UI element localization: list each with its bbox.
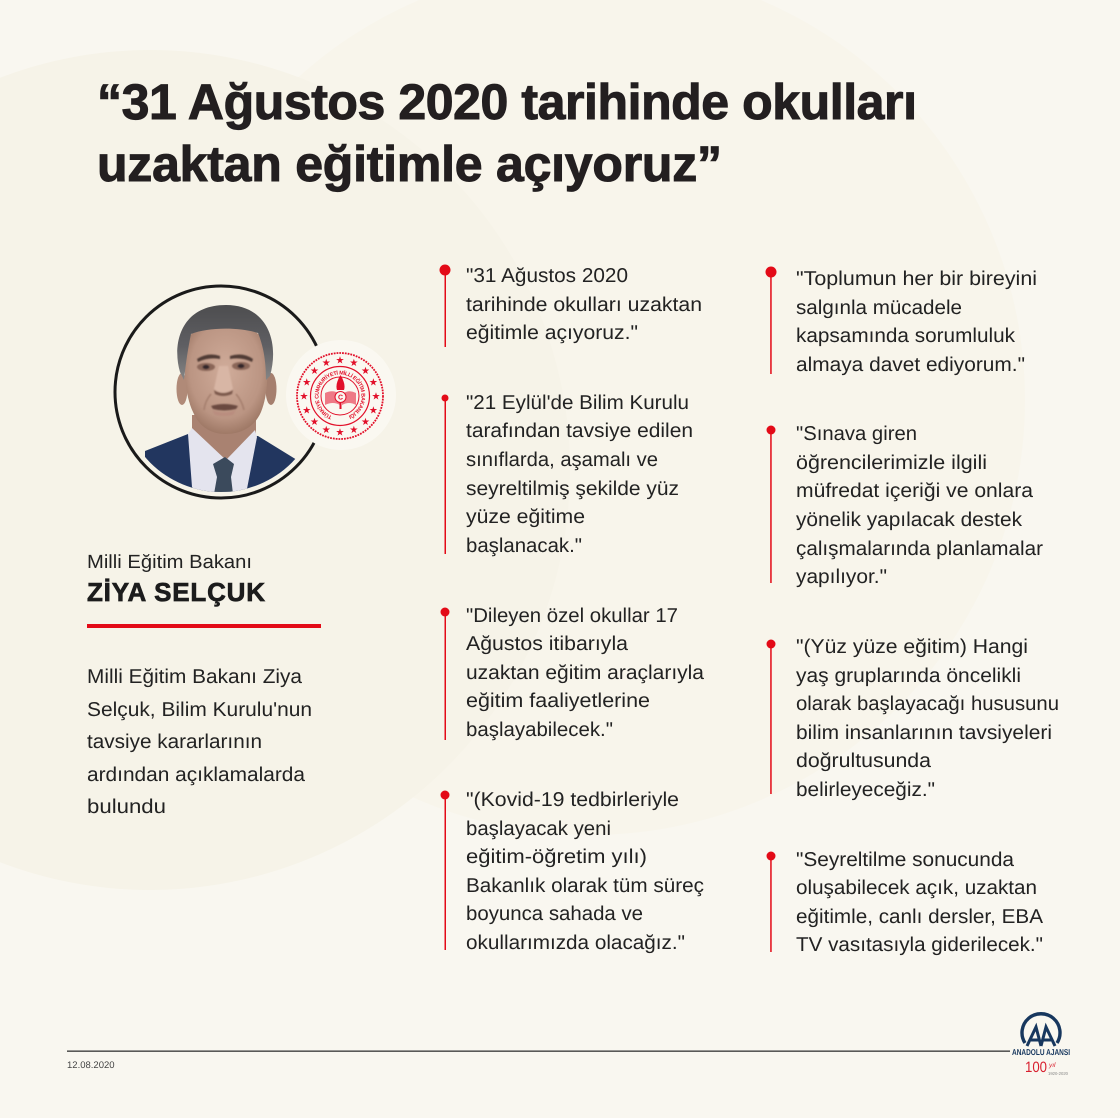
quote 3: uzaktan eğitim araçlarıyla: [466, 662, 705, 684]
quote 4: eğitim-öğretim yılı): [466, 846, 647, 868]
eye sockets: [197, 363, 215, 371]
summary paragraph: Selçuk, Bilim Kurulu'nun: [87, 699, 312, 721]
quote 1: tarihinde okulları uzaktan: [466, 294, 702, 316]
summary paragraph: [87, 666, 312, 818]
portrait of minister with ring: [115, 286, 327, 500]
quote 7: yaş gruplarında öncelikli: [796, 665, 1021, 687]
quote 5: "Toplumun her bir bireyini: [796, 268, 1037, 290]
emblem: ministry seal: ★: [369, 378, 378, 389]
footer rule: [67, 1050, 1010, 1052]
emblem: ministry seal: ★: [310, 366, 319, 377]
quote 5: kapsamında sorumluluk: [796, 325, 1016, 347]
quote 7: doğrultusunda: [796, 750, 932, 772]
quote 2: tarafından tavsiye edilen: [466, 420, 693, 442]
quote 6: yönelik yapılacak destek: [796, 509, 1023, 531]
quote 4: boyunca sahada ve: [466, 903, 643, 925]
nose: [214, 366, 233, 392]
quote 6: [766, 423, 1043, 588]
quote 4: Bakanlık olarak tüm süreç: [466, 875, 704, 897]
quote 4: [440, 789, 704, 954]
minister name: ZİYA SELÇUK: [87, 577, 265, 607]
emblem: ministry seal: ★: [361, 366, 370, 377]
quote 8: TV vasıtasıyla giderilecek.": [796, 934, 1043, 956]
quote 4: "(Kovid-19 tedbirleriyle: [466, 789, 679, 811]
red rule: [87, 624, 321, 628]
emblem: ministry seal: ★: [322, 358, 331, 369]
emblem: ministry seal: ★: [322, 425, 331, 436]
minister role: Milli Eğitim Bakanı: [87, 552, 252, 573]
quote 2: [442, 392, 693, 557]
emblem: ministry seal: C: [338, 394, 343, 402]
emblem: ministry seal: ★: [300, 392, 309, 402]
quote 3: [440, 605, 705, 741]
face: [185, 325, 267, 434]
logo: Anadolu Ajansi: ANADOLU AJANSI: [1012, 1047, 1070, 1057]
shirt: [188, 428, 257, 494]
emblem: ministry seal: ★: [336, 428, 345, 438]
emblem: ministry seal: ★: [310, 417, 319, 428]
quote 8: [766, 849, 1044, 956]
logo: Anadolu Ajansi: [1012, 1014, 1070, 1076]
emblem: ministry seal: ★: [336, 356, 345, 366]
quote 7: olarak başlayacağı hususunu: [796, 693, 1059, 715]
quote 7: bilim insanlarının tavsiyeleri: [796, 722, 1052, 744]
quote 7: [766, 636, 1059, 801]
mouth: [211, 404, 238, 410]
quote 8: oluşabilecek açık, uzaktan: [796, 877, 1037, 899]
title: uzaktan eğitimle açıyoruz”: [97, 136, 722, 192]
quote 6: "Sınava giren: [796, 423, 917, 445]
quote 5: almaya davet ediyorum.": [796, 354, 1025, 376]
quote 6: öğrencilerimizle ilgili: [796, 452, 987, 474]
emblem: ministry seal: ★: [372, 392, 381, 402]
quote 1: "31 Ağustos 2020: [466, 265, 628, 287]
summary paragraph: tavsiye kararlarının: [87, 731, 262, 753]
quote 3: başlayabilecek.": [466, 719, 613, 741]
quote 1: eğitimle açıyoruz.": [466, 322, 638, 344]
hair: [177, 305, 273, 380]
quote 2: sınıflarda, aşamalı ve: [466, 449, 658, 471]
emblem: ministry seal: ★: [361, 417, 370, 428]
tie: [213, 457, 234, 494]
emblem: ministry seal: ★: [302, 405, 311, 416]
quote 4: başlayacak yeni: [466, 818, 611, 840]
ears: [176, 373, 188, 405]
emblem: ministry seal: ★: [369, 405, 378, 416]
summary paragraph: ardından açıklamalarda: [87, 764, 306, 786]
quote 8: eğitimle, canlı dersler, EBA: [796, 906, 1044, 928]
quote 3: Ağustos itibarıyla: [466, 633, 629, 655]
logo: Anadolu Ajansi: 1920-2020: [1048, 1071, 1069, 1076]
logo: Anadolu Ajansi: 100: [1025, 1059, 1047, 1076]
quote 3: eğitim faaliyetlerine: [466, 690, 650, 712]
quote 2: seyreltilmiş şekilde yüz: [466, 478, 679, 500]
quote 6: müfredat içeriği ve onlara: [796, 480, 1034, 502]
date: 12.08.2020: [67, 1060, 115, 1071]
quote 6: yapılıyor.": [796, 566, 887, 588]
summary paragraph: bulundu: [87, 796, 166, 818]
quote 6: çalışmalarında planlamalar: [796, 538, 1043, 560]
neck: [192, 415, 256, 462]
quote 7: belirleyeceğiz.": [796, 779, 935, 801]
quote 5: salgınla mücadele: [796, 297, 962, 319]
quote 5: [766, 266, 1037, 376]
emblem: ministry seal: ★: [349, 358, 358, 369]
emblem: ministry seal: TÜRKİYE CUMHURİYETİ MİLLİ EĞİTİM BAKANLIĞI: [314, 370, 366, 420]
brows: [197, 355, 253, 362]
quote 7: "(Yüz yüze eğitim) Hangi: [796, 636, 1028, 658]
logo: Anadolu Ajansi: yıl: [1048, 1062, 1056, 1069]
quote 1: [440, 264, 702, 347]
quote 2: başlanacak.": [466, 535, 582, 557]
quote 8: "Seyreltilme sonucunda: [796, 849, 1015, 871]
emblem: ministry seal: [286, 340, 396, 450]
cheek folds: [204, 394, 244, 410]
suit: [145, 434, 296, 492]
title: “31 Ağustos 2020 tarihinde okulları: [97, 74, 917, 130]
title: [97, 74, 917, 192]
quote 4: okullarımızda olacağız.": [466, 932, 685, 954]
summary paragraph: Milli Eğitim Bakanı Ziya: [87, 666, 303, 688]
quote 2: "21 Eylül'de Bilim Kurulu: [466, 392, 689, 414]
emblem: ministry seal: ★: [302, 378, 311, 389]
emblem: ministry seal: ★: [349, 425, 358, 436]
quote 3: "Dileyen özel okullar 17: [466, 605, 678, 627]
quote 2: yüze eğitime: [466, 506, 585, 528]
